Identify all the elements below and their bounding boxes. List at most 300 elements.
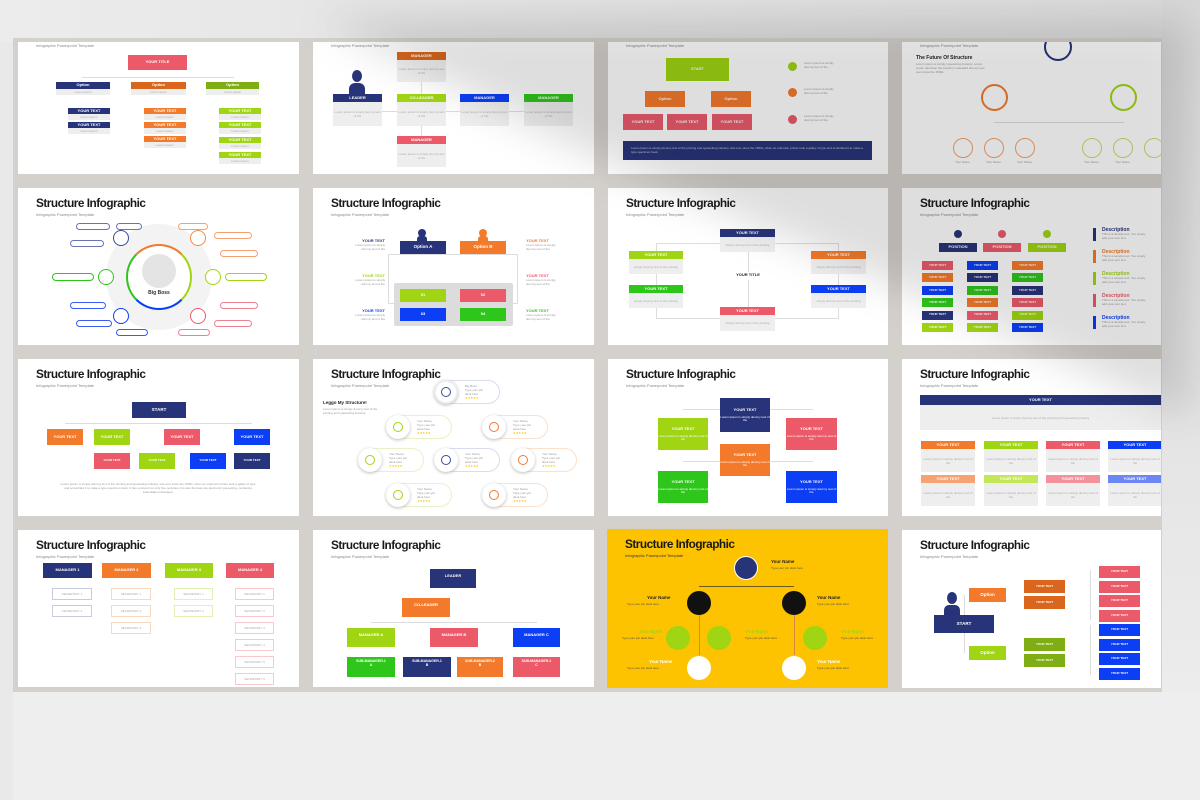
slide r4c4: start options tree: Infographic Powerpoint Template [920, 554, 978, 559]
managers: C [535, 663, 538, 667]
slide r3c3: colored boxes: Infographic Powerpoint Template [626, 383, 684, 388]
circles lime [622, 626, 873, 650]
box: option lime: Option [980, 650, 995, 655]
column boxes: YOUR TEXT [974, 263, 991, 267]
box: leader: LEADER [349, 95, 366, 100]
column boxes: YOUR TEXT [929, 300, 946, 304]
box lime [658, 418, 708, 450]
gray panel grid [394, 283, 513, 326]
mid boxes: YOUR TEXT [1036, 584, 1053, 588]
manager 4 [226, 563, 274, 685]
managers: MANAGER A [359, 632, 383, 637]
navy children: YOUR TEXT [78, 122, 100, 127]
manager 4: SECRETARY 4 [244, 643, 265, 647]
slide r1c1: title tree [18, 42, 299, 174]
slide r1c1: title tree: Infographic Powerpoint Template [36, 43, 94, 48]
circles white: Type your job desk here [817, 666, 849, 670]
slide r4c2: leader org chart: Infographic Powerpoint Template [331, 554, 389, 559]
title: Structure Infographic [920, 538, 1029, 552]
position heads [939, 230, 1066, 252]
small circles: Your Name [1115, 160, 1130, 164]
mid boxes: YOUR TEXT [1036, 600, 1053, 604]
grid: YOUR TEXT [1062, 476, 1084, 481]
left strip [0, 42, 13, 800]
pills: ★★★★★ [513, 431, 526, 435]
pills: ★★★★★ [542, 464, 555, 468]
box: manager green [524, 94, 573, 102]
top band [0, 0, 1200, 42]
pills: desk here [417, 495, 430, 499]
box: option green: Option [226, 82, 239, 87]
box: option lime [969, 646, 1006, 660]
box right blue [811, 285, 866, 293]
slide r2c3: your title cross: simply dummy text of the printing [817, 264, 860, 268]
circles white: Your Name [817, 659, 840, 664]
manager 3: MANAGER 3 [177, 567, 201, 572]
big boss circle [107, 224, 211, 330]
icon: person [944, 592, 960, 615]
grid: YOUR TEXT [1062, 442, 1084, 447]
box: option orange [969, 588, 1006, 602]
slide r2c1: big boss [18, 188, 299, 345]
box pink: Lorem ipsum is simply dummy text of the [787, 434, 836, 441]
box blue: YOUR TEXT [800, 478, 823, 484]
legend dots [788, 61, 834, 124]
pills: Type your job [542, 456, 560, 460]
slide r1c2: leader managers: Lorem ipsum is simply dummy text of the [398, 67, 444, 75]
box left lime [629, 251, 683, 259]
green children: Lorem ipsum [231, 115, 249, 119]
box: your title: YOUR TITLE [146, 59, 169, 64]
box: option b [460, 241, 506, 254]
pills: desk here [542, 460, 555, 464]
small circles: Your Name [1084, 160, 1099, 164]
managers: SUB-MANAGER-2 [465, 659, 495, 663]
managers [347, 628, 560, 677]
circle navy top [1044, 33, 1072, 61]
title: Structure Infographic [626, 367, 735, 381]
pills: desk here [513, 495, 526, 499]
small circles: Your Name [986, 160, 1001, 164]
box: manager orange [397, 52, 446, 60]
descriptions: add your own text [1102, 324, 1126, 328]
position heads: POSITION [948, 244, 968, 249]
box: manager pink [397, 136, 446, 144]
manager 3: SECRETARY 2 [183, 609, 204, 613]
manager 2 [102, 563, 151, 634]
row of four: YOUR TEXT [101, 434, 123, 439]
orange children: Lorem ipsum [156, 143, 174, 147]
slide r1c3: start options [608, 42, 888, 174]
title: Structure Infographic [36, 367, 145, 381]
circles black [627, 591, 849, 615]
box: manager blue [460, 94, 509, 102]
box: option navy [56, 82, 110, 89]
descriptions: Description [1102, 271, 1130, 277]
box green [658, 471, 708, 503]
box: manager blue: MANAGER [474, 95, 495, 100]
column boxes [922, 261, 1043, 332]
pills: Type your job [465, 456, 483, 460]
box green: YOUR TEXT [672, 478, 694, 484]
slide r3c2: leggo my structure [313, 359, 594, 516]
position heads: POSITION [992, 244, 1012, 249]
box: your title [128, 55, 187, 70]
right texts: dummy text of the [526, 317, 550, 321]
column boxes: YOUR TEXT [1019, 312, 1036, 316]
column boxes: YOUR TEXT [1019, 300, 1036, 304]
box: manager green: MANAGER [538, 95, 559, 100]
slide r2c3: your title cross: simply dummy text of the printing [726, 242, 769, 246]
grid [921, 441, 1161, 506]
row of four: YOUR TEXT [54, 434, 76, 439]
row of four [47, 429, 270, 469]
pills: Type your job [513, 491, 531, 495]
pills: Your Name [389, 452, 404, 456]
managers: SUB-MANAGER-1 [412, 659, 442, 663]
slide r1c4: future of structure: Lorem ipsum is simply typesetting industry. Lorem ipsum has been the industry's standard dummy text ever since the 1500s [916, 62, 984, 74]
small circles: Your Name [1017, 160, 1032, 164]
manager 3: SECRETARY 1 [183, 592, 204, 596]
orange children: YOUR TEXT [154, 108, 176, 113]
gray panel grid: 02 [481, 292, 485, 297]
orange children: YOUR TEXT [154, 122, 176, 127]
legend dots: Lorem ipsum is simply [804, 87, 834, 91]
manager 4: SECRETARY 1 [244, 592, 265, 596]
column boxes: YOUR TEXT [974, 325, 991, 329]
manager 2: MANAGER 2 [114, 567, 138, 572]
box: your text 2: YOUR TEXT [676, 119, 698, 124]
slide r1c2: leader managers: Lorem ipsum is simply dummy text of the [461, 110, 508, 118]
legend dots: dummy text of the [804, 118, 828, 122]
center title [723, 272, 773, 280]
box right orange: YOUR TEXT [827, 252, 850, 257]
box: co-leader: CO-LEADER [414, 602, 438, 607]
box: start: START [152, 407, 166, 412]
box green: Lorem ipsum is simply dummy text of the [658, 487, 708, 494]
box orange [720, 444, 770, 476]
circles lime: Type your job desk here [745, 636, 777, 640]
green children: Lorem ipsum [231, 159, 249, 163]
box lime: YOUR TEXT [672, 426, 694, 430]
green children [219, 108, 261, 164]
slide r1c2: leader managers: Infographic Powerpoint Template [331, 43, 389, 48]
descriptions: Description [1102, 315, 1130, 321]
manager 4: SECRETARY 6 [244, 677, 265, 681]
gray panel grid: 04 [481, 311, 485, 316]
row of four: YOUR TEXT [171, 434, 193, 439]
manager 3 [165, 563, 213, 617]
box orange: YOUR TEXT [734, 452, 756, 456]
box: option 1: Option [659, 96, 671, 101]
right boxes: YOUR TEXT [1111, 671, 1128, 675]
box: option green [206, 82, 259, 89]
box blue: Lorem ipsum is simply dummy text of the [787, 487, 836, 494]
box: start: START [957, 621, 971, 626]
green children: YOUR TEXT [229, 152, 251, 157]
small circles: Your Name [955, 160, 970, 164]
pills: desk here [513, 427, 526, 431]
center title: YOUR TITLE [736, 272, 760, 277]
pills: ★★★★★ [513, 499, 526, 503]
navy children [68, 108, 110, 134]
box left lime: YOUR TEXT [645, 252, 667, 257]
box: start [666, 58, 729, 81]
circle navy [734, 556, 758, 580]
box pink [786, 418, 837, 450]
slide r3c1: start tree: Infographic Powerpoint Template [36, 383, 94, 388]
box: start: START [691, 66, 704, 71]
box: your text 1: YOUR TEXT [632, 119, 654, 124]
descriptions: add your own text [1102, 258, 1126, 262]
big boss circle: Big Boss [148, 290, 170, 296]
descriptions: This is a sample text. You simply [1102, 276, 1145, 280]
manager 2: SECRETARY 2 [121, 609, 141, 613]
navy children: YOUR TEXT [78, 108, 100, 113]
box top navy: YOUR TEXT [736, 230, 759, 235]
column boxes: YOUR TEXT [974, 288, 991, 292]
right boxes: YOUR TEXT [1111, 656, 1128, 660]
slide r1c3: start options: Infographic Powerpoint Template [626, 43, 684, 48]
slide r1c1: title tree: Lorem ipsum [74, 90, 92, 94]
box: option navy: Option [77, 82, 89, 87]
pills: desk here [417, 427, 430, 431]
title: Structure Infographic [36, 196, 145, 210]
right texts [526, 238, 556, 321]
right texts: dummy text of the [526, 247, 550, 251]
slide r1c2: leader managers: Lorem ipsum is simply dummy text of the [334, 110, 380, 118]
circles lime: Your Name [745, 629, 768, 634]
slide r2c3: your title cross [608, 188, 888, 345]
left texts: YOUR TEXT [362, 273, 385, 278]
left texts: Lorem ipsum is simply [355, 278, 385, 282]
grid: Lorem ipsum is simply dummy text of the [986, 490, 1036, 498]
slide r2c3: your title cross: simply dummy text of the printing [726, 321, 769, 325]
descriptions: Description [1102, 227, 1130, 233]
mid boxes: YOUR TEXT [1036, 642, 1053, 646]
row of four: YOUR TEXT [199, 458, 217, 462]
right boxes [1099, 566, 1140, 680]
box: option a [400, 241, 446, 254]
grid: YOUR TEXT [937, 476, 959, 481]
box: option orange: Option [980, 592, 995, 597]
slide r3c3: colored boxes [608, 359, 888, 516]
pills: Your Name [513, 419, 528, 423]
pills: Type your job [513, 423, 531, 427]
left texts: dummy text of the [361, 247, 385, 251]
manager 2: SECRETARY 1 [121, 592, 141, 596]
header bar [920, 395, 1161, 405]
slide r4c1: managers secretaries [18, 530, 299, 687]
descriptions: This is a sample text. You simply [1102, 298, 1145, 302]
row of four: YOUR TEXT [148, 458, 166, 462]
left texts: Lorem ipsum is simply [355, 313, 385, 317]
slide r2c3: your title cross: Infographic Powerpoint Template [626, 212, 684, 217]
left texts: dummy text of the [361, 282, 385, 286]
pills: Type your job [389, 456, 407, 460]
manager 2: SECRETARY 3 [121, 626, 141, 630]
descriptions: add your own text [1102, 302, 1126, 306]
slide r2c3: your title cross: simply dummy text of the printing [817, 298, 860, 302]
box left green: YOUR TEXT [645, 286, 667, 291]
box bottom pink: YOUR TEXT [736, 308, 759, 313]
grid: YOUR TEXT [1000, 442, 1022, 447]
green children: Lorem ipsum [231, 144, 249, 148]
slide r4c3: yellow circles [607, 529, 888, 688]
gray panel grid: 03 [421, 311, 425, 316]
manager 1: MANAGER 1 [55, 567, 80, 572]
box: manager pink: MANAGER [411, 137, 432, 142]
descriptions [1093, 227, 1146, 329]
paragraph: Lorem Ipsum is simply dummy text of the printing and typesetting industry. lest ever since the 1500s, when an unknown printer took a galley of type and scrambled it to make a type specimen book. It has survived not only five centuries, but also the leap into electronic typesetting, remaining essentially unchanged. [60, 482, 256, 494]
legend dots: dummy text of the [804, 91, 828, 95]
managers: MANAGER B [442, 632, 466, 637]
green children: YOUR TEXT [229, 137, 251, 142]
descriptions: This is a sample text. You simply [1102, 254, 1145, 258]
pills: Your Name [465, 452, 480, 456]
box: your text 3 [712, 114, 752, 130]
pills [356, 380, 577, 510]
mid boxes: YOUR TEXT [1036, 658, 1053, 662]
right texts: YOUR TEXT [526, 238, 549, 243]
managers: B [479, 663, 481, 667]
heading: leggo: Leggo My Structure! [323, 400, 367, 405]
box navy [720, 398, 770, 432]
box: option 1 [645, 91, 685, 107]
box: option orange [131, 82, 186, 89]
pills: desk here [465, 460, 478, 464]
box: your text 3: YOUR TEXT [721, 119, 743, 124]
descriptions: This is a sample text. You simply [1102, 232, 1145, 236]
box: leader: LEADER [445, 573, 461, 578]
grid: Lorem ipsum is simply dummy text of the [923, 456, 973, 464]
column boxes: YOUR TEXT [929, 288, 946, 292]
circles lime: Your Name [841, 629, 864, 634]
slide r1c2: leader managers: Lorem ipsum is simply dummy text of the [398, 110, 444, 118]
title: Structure Infographic [626, 196, 735, 210]
circles lime: Type your job desk here [841, 636, 873, 640]
icon: person b [478, 229, 488, 241]
pills: ★★★★★ [417, 431, 430, 435]
slide r4c4: start options tree [902, 530, 1161, 688]
slide r2c2: option a/b: Infographic Powerpoint Template [331, 212, 389, 217]
slide r2c1: big boss: Infographic Powerpoint Template [36, 212, 94, 217]
pills: Your Name [417, 419, 432, 423]
slide r3c2: leggo my structure: Lorem ipsum is simply dummy text of the printing and typesetting industry. [323, 407, 377, 415]
column boxes: YOUR TEXT [929, 263, 946, 267]
navy text bar [623, 141, 872, 160]
legend dots: Lorem ipsum is simply [804, 114, 834, 118]
box: co-leader [397, 94, 446, 102]
right boxes: YOUR TEXT [1111, 642, 1128, 646]
descriptions: Description [1102, 249, 1130, 255]
pills: Your Name [513, 487, 528, 491]
icon: leader woman [349, 70, 365, 94]
right texts: YOUR TEXT [526, 273, 549, 278]
title: Structure Infographic [36, 538, 145, 552]
circles lime: Your Name [639, 629, 662, 634]
managers: A [370, 663, 372, 667]
box: co-leader: CO-LEADER [410, 95, 433, 100]
right boxes: YOUR TEXT [1111, 584, 1128, 588]
box top navy [720, 229, 775, 237]
grid: Lorem ipsum is simply dummy text of the [1048, 490, 1098, 498]
row of four: YOUR TEXT [241, 434, 263, 439]
pills: Your Name [417, 487, 432, 491]
pills: ★★★★★ [465, 464, 478, 468]
box navy: Lorem ipsum is simply dummy text of the [720, 415, 770, 422]
green children: YOUR TEXT [229, 108, 251, 113]
circles black: Type your job desk here [817, 602, 849, 606]
left texts [355, 238, 385, 321]
mid boxes [1024, 580, 1065, 667]
slide r2c2: option a/b [313, 188, 594, 345]
grid: YOUR TEXT [937, 442, 959, 447]
manager 1 [43, 563, 92, 617]
right texts: Lorem ipsum is simply [526, 313, 556, 317]
orange children: Lorem ipsum [156, 129, 174, 133]
right boxes: YOUR TEXT [1111, 613, 1128, 617]
orange children: Lorem ipsum [156, 115, 174, 119]
circles white: Type your job desk here [627, 666, 659, 670]
legend dots: dummy text of the [804, 65, 828, 69]
slide r1c1: title tree: Lorem ipsum [224, 90, 241, 94]
grid: Lorem ipsum is simply dummy text of the [1048, 456, 1098, 464]
title: Structure Infographic [920, 196, 1029, 210]
pills: desk here [465, 392, 478, 396]
row of four: YOUR TEXT [243, 458, 261, 462]
box: your text 2 [667, 114, 707, 130]
managers: MANAGER C [524, 632, 549, 637]
right boxes: YOUR TEXT [1111, 569, 1128, 573]
navy children: Lorem ipsum [80, 129, 98, 133]
nodes [52, 223, 267, 336]
slide r4c1: managers secretaries: Infographic Powerpoint Template [36, 554, 94, 559]
green children: YOUR TEXT [229, 122, 251, 127]
slide r1c2: leader managers: Lorem ipsum is simply dummy text of the [398, 152, 444, 160]
pills: ★★★★★ [465, 396, 478, 400]
heading: future of structure: The Future Of Structure [916, 55, 972, 61]
pills: Your Name [542, 452, 557, 456]
circles lime: Type your job desk here [622, 636, 654, 640]
left texts: YOUR TEXT [362, 308, 385, 313]
box orange: Lorem ipsum is simply dummy text of the [720, 460, 770, 467]
manager 4: SECRETARY 3 [244, 626, 265, 630]
manager 4: SECRETARY 5 [244, 660, 265, 664]
slide r2c3: your title cross: simply dummy text of the printing [634, 298, 678, 302]
right texts: Lorem ipsum is simply [526, 278, 556, 282]
column boxes: YOUR TEXT [974, 312, 991, 316]
box blue [786, 471, 837, 503]
legend dots: Lorem ipsum is simply [804, 61, 834, 65]
descriptions: This is a sample text. You simply [1102, 320, 1145, 324]
box lime: Lorem ipsum is simply dummy text of the [658, 434, 708, 441]
green children: Lorem ipsum [231, 129, 249, 133]
column boxes: YOUR TEXT [929, 325, 946, 329]
right side strip [1162, 0, 1200, 692]
slide r4c3: yellow circles: Type your job desk here [771, 566, 803, 570]
slide r2c4: positions [902, 188, 1161, 345]
pills: ★★★★★ [389, 464, 402, 468]
icon: person a [417, 229, 427, 241]
grid: Lorem ipsum is simply dummy text of the [1110, 456, 1160, 464]
right texts: dummy text of the [526, 282, 550, 286]
backdrop frame [13, 38, 1162, 692]
slide r1c2: leader managers [313, 42, 594, 174]
managers: B [426, 663, 428, 667]
right boxes: YOUR TEXT [1111, 598, 1128, 602]
circles black: Your Name [647, 595, 670, 600]
